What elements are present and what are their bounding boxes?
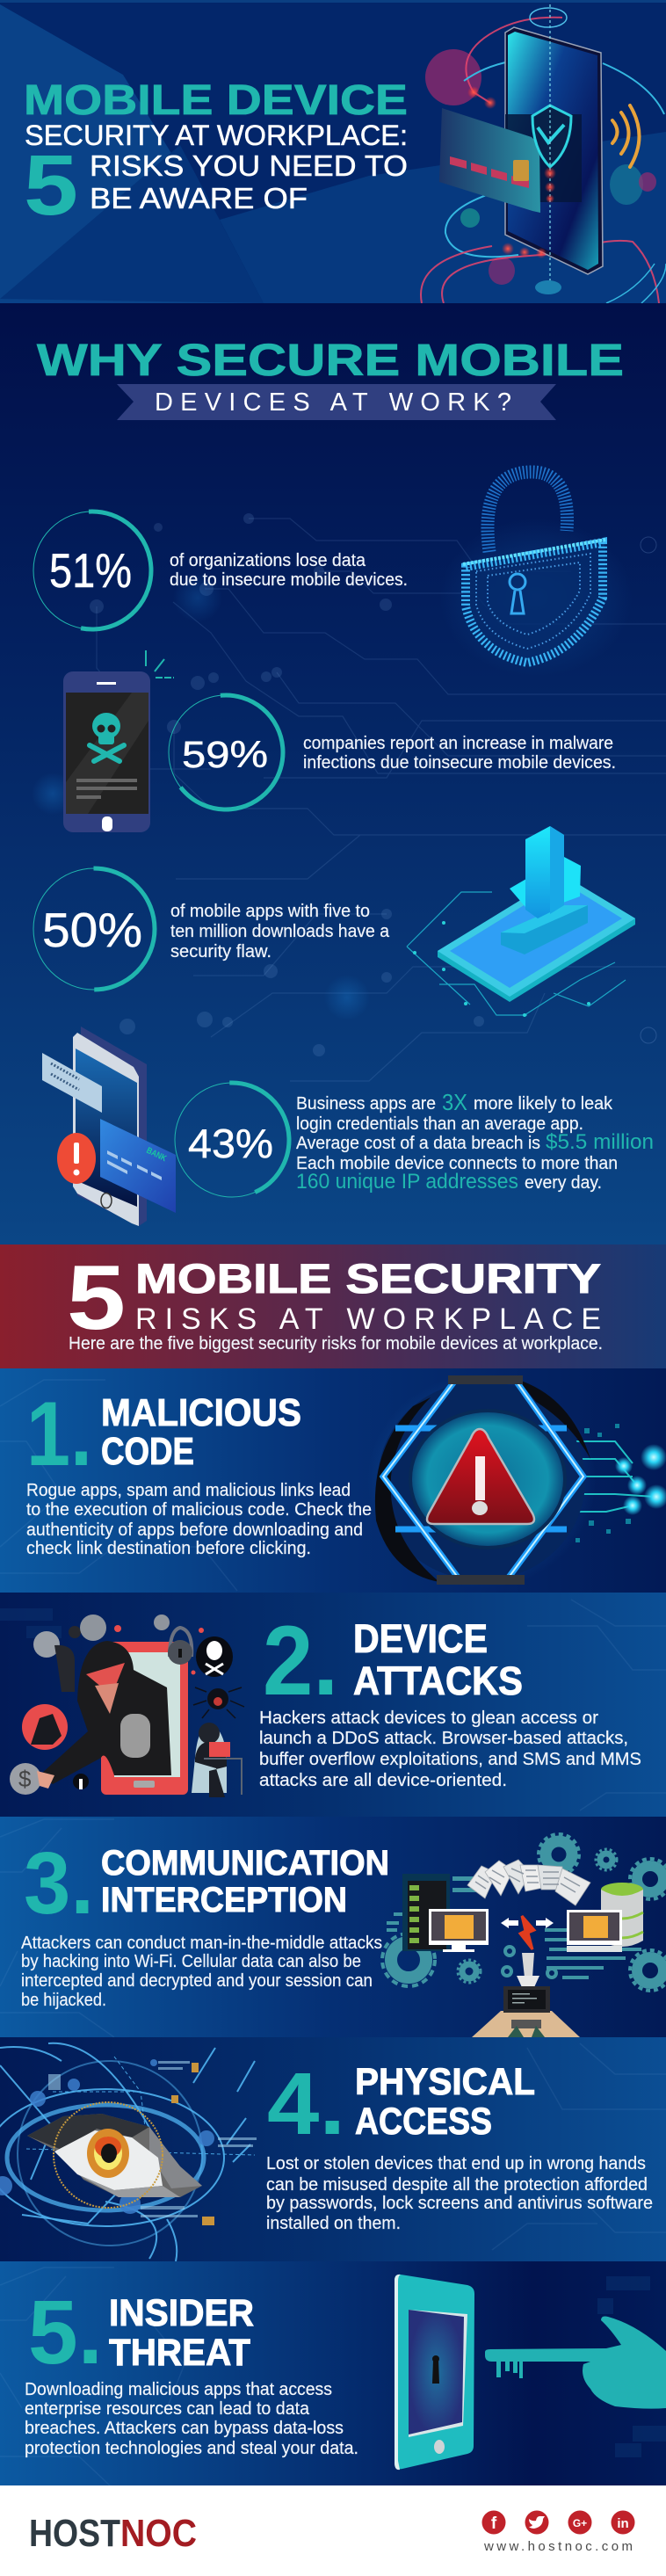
stat: 59 percent: infections due toinsecure mobile devices. <box>303 753 616 773</box>
stat: 43 percent: more likely to leak <box>474 1094 613 1114</box>
stat: 50 percent: 50% <box>42 903 142 957</box>
risk 4 text: can be misused despite all the protection afforded <box>266 2175 648 2195</box>
logo: hostnoc <box>29 2512 197 2555</box>
title: security at workplace: SECURITY AT WORKPLACE: <box>25 120 408 151</box>
stat: 43 percent: Average cost of a data breach is <box>296 1134 540 1153</box>
risk 1 number: 1. <box>26 1383 92 1485</box>
panel: footer <box>0 2485 666 2576</box>
ribbon: devices at work <box>117 384 556 420</box>
risk 4 heading <box>355 2061 535 2143</box>
social icons: G+ <box>573 2517 587 2529</box>
title: be aware of: BE AWARE OF <box>90 182 308 214</box>
risk 4 text <box>266 2154 653 2233</box>
risk 5 text <box>25 2380 358 2458</box>
risk 3 number: 3. <box>24 1834 94 1933</box>
icon: tablet with keyhole <box>395 2275 474 2470</box>
title: mobile device: MOBILE DEVICE <box>24 77 408 124</box>
illustration: data interception between computers <box>382 1834 666 2037</box>
risk 4 text: Lost or stolen devices that end up in wrong hands <box>266 2154 646 2173</box>
risk 3 text: by hacking into Wi-Fi. Cellular data can also be <box>21 1952 361 1971</box>
panel: why secure mobile devices <box>0 303 666 1244</box>
stat: 50 percent: of mobile apps with five to <box>170 902 370 921</box>
risk 5 number: 5. <box>28 2282 103 2383</box>
risk 4 heading: PHYSICAL <box>355 2061 535 2103</box>
risk 1 text: Rogue apps, spam and malicious links lead <box>26 1481 351 1500</box>
stat: 50 percent <box>33 868 390 990</box>
illustration: digital eye scan <box>0 2043 257 2261</box>
website url: www.hostnoc.com <box>483 2539 633 2554</box>
stat: 43 percent: login credentials than an average app. <box>296 1114 583 1134</box>
stat: 59 percent <box>164 691 616 814</box>
risk 4 heading: ACCESS <box>355 2101 492 2143</box>
risk 4 number: 4. <box>267 2055 345 2153</box>
stat: 50 percent: security flaw. <box>170 942 271 961</box>
risk 1 text <box>26 1481 372 1558</box>
stat: 43 percent: $5.5 million <box>546 1130 654 1154</box>
icon: phone with card and alert: BANK <box>145 1146 169 1164</box>
risk 2 text: Hackers attack devices to glean access or <box>259 1709 598 1728</box>
stat: 43 percent: 3X <box>442 1089 467 1115</box>
stat: 50 percent: ten million downloads have a <box>170 922 390 941</box>
risk 5 text: Downloading malicious apps that access <box>25 2380 332 2399</box>
risk 3 text: be hijacked. <box>21 1991 106 2010</box>
stat: 43 percent: Each mobile device connects to more than <box>296 1154 618 1173</box>
risk 2 number: 2. <box>263 1606 338 1716</box>
heading: why secure mobile: WHY SECURE MOBILE <box>37 335 624 385</box>
risk 1 heading: MALICIOUS <box>101 1391 301 1434</box>
risk 1 text: to the execution of malicious code. Check the <box>26 1500 372 1520</box>
risk 2 text: attacks are all device-oriented. <box>259 1771 507 1790</box>
icon: warning triangle in cyber orb <box>367 1374 666 1588</box>
risk 5 text: enterprise resources can lead to data <box>25 2399 310 2419</box>
panel: five mobile security risks banner <box>0 1244 666 1368</box>
risk 5 heading <box>109 2292 254 2374</box>
stat: 51 percent: 51% <box>49 543 132 598</box>
banner heading line 2: RISKS AT WORKPLACE <box>135 1303 601 1336</box>
social icons: in <box>617 2516 629 2531</box>
social icons: f <box>491 2514 497 2533</box>
illustration: secure phone with card and shield <box>421 4 666 303</box>
stat: 51 percent <box>31 509 408 632</box>
panel: hero <box>0 0 666 303</box>
title: large number 5: 5 <box>24 137 78 233</box>
stat: 43 percent: 43% <box>188 1121 273 1166</box>
stat: 51 percent: of organizations lose data <box>170 551 366 570</box>
panel: risk 2 device attacks <box>0 1593 666 1817</box>
banner heading line 1: MOBILE SECURITY <box>135 1255 601 1302</box>
risk 2 text: buffer overflow exploitations, and SMS and MMS <box>259 1750 641 1769</box>
banner subtitle: Here are the five biggest security risks for mobile devices at workplace. <box>69 1334 603 1353</box>
icon: phone with card and alert <box>42 1027 176 1226</box>
risk 2 text <box>259 1709 641 1790</box>
risk 2 heading: DEVICE <box>353 1616 488 1661</box>
logo: hostnoc: NOC <box>120 2512 197 2555</box>
stat: 43 percent: every day. <box>525 1173 602 1193</box>
risk 3 heading: COMMUNICATION <box>101 1844 389 1883</box>
social icons <box>481 2510 634 2535</box>
banner number 5: 5 <box>67 1247 126 1349</box>
risk 1 heading <box>101 1391 301 1473</box>
icon: digital padlock <box>439 472 633 677</box>
panel: risk 4 physical access <box>0 2037 666 2261</box>
logo: hostnoc: HOST <box>29 2512 120 2555</box>
risk 5 text: breaches. Attackers can bypass data-loss <box>25 2419 344 2438</box>
risk 3 heading: INTERCEPTION <box>101 1881 347 1919</box>
circuit background <box>32 513 666 1081</box>
risk 2 heading: ATTACKS <box>353 1658 523 1703</box>
panel: risk 5 insider threat <box>0 2261 666 2485</box>
icon: tablet with download arrow <box>407 826 635 1017</box>
risk 1 text: check link destination before clicking. <box>26 1539 311 1558</box>
risk 5 heading: INSIDER <box>109 2292 254 2334</box>
title: risks you need to: RISKS YOU NEED TO <box>90 149 408 182</box>
risk 3 heading <box>101 1844 389 1919</box>
stat: 59 percent: 59% <box>182 734 268 776</box>
risk 4 text: installed on them. <box>266 2214 401 2233</box>
stat: 59 percent: companies report an increase in malware <box>303 734 613 753</box>
stat: 43 percent: Business apps are <box>296 1094 436 1114</box>
stat: 51 percent: due to insecure mobile devices. <box>170 570 408 590</box>
risk 3 text <box>21 1934 382 2010</box>
illustration: hacker emerging from phone <box>10 1615 244 1797</box>
risk 4 text: by passwords, lock screens and antivirus software <box>266 2194 653 2213</box>
risk 1 text: authenticity of apps before downloading and <box>26 1520 363 1540</box>
risk 3 text: Attackers can conduct man-in-the-middle attacks <box>21 1934 382 1953</box>
panel: risk 3 communication interception <box>0 1817 666 2037</box>
icon: phone with skull <box>63 650 174 832</box>
illustration: hacker emerging from phone: $ <box>18 1766 32 1792</box>
stat: 43 percent <box>173 1081 654 1199</box>
icon: hand with key finger <box>485 2317 666 2409</box>
ribbon: devices at work: DEVICES AT WORK? <box>155 388 511 417</box>
risk 1 heading: CODE <box>101 1430 194 1473</box>
risk 2 heading <box>353 1616 523 1703</box>
risk 3 text: intercepted and decrypted and your session can <box>21 1971 373 1991</box>
stat: 43 percent: 160 unique IP addresses <box>296 1170 518 1194</box>
panel: risk 1 malicious code <box>0 1368 666 1593</box>
risk 5 text: protection technologies and steal your data. <box>25 2439 358 2458</box>
risk 5 heading: THREAT <box>109 2332 250 2374</box>
risk 2 text: launch a DDoS attack. Browser-based attacks, <box>259 1729 628 1748</box>
